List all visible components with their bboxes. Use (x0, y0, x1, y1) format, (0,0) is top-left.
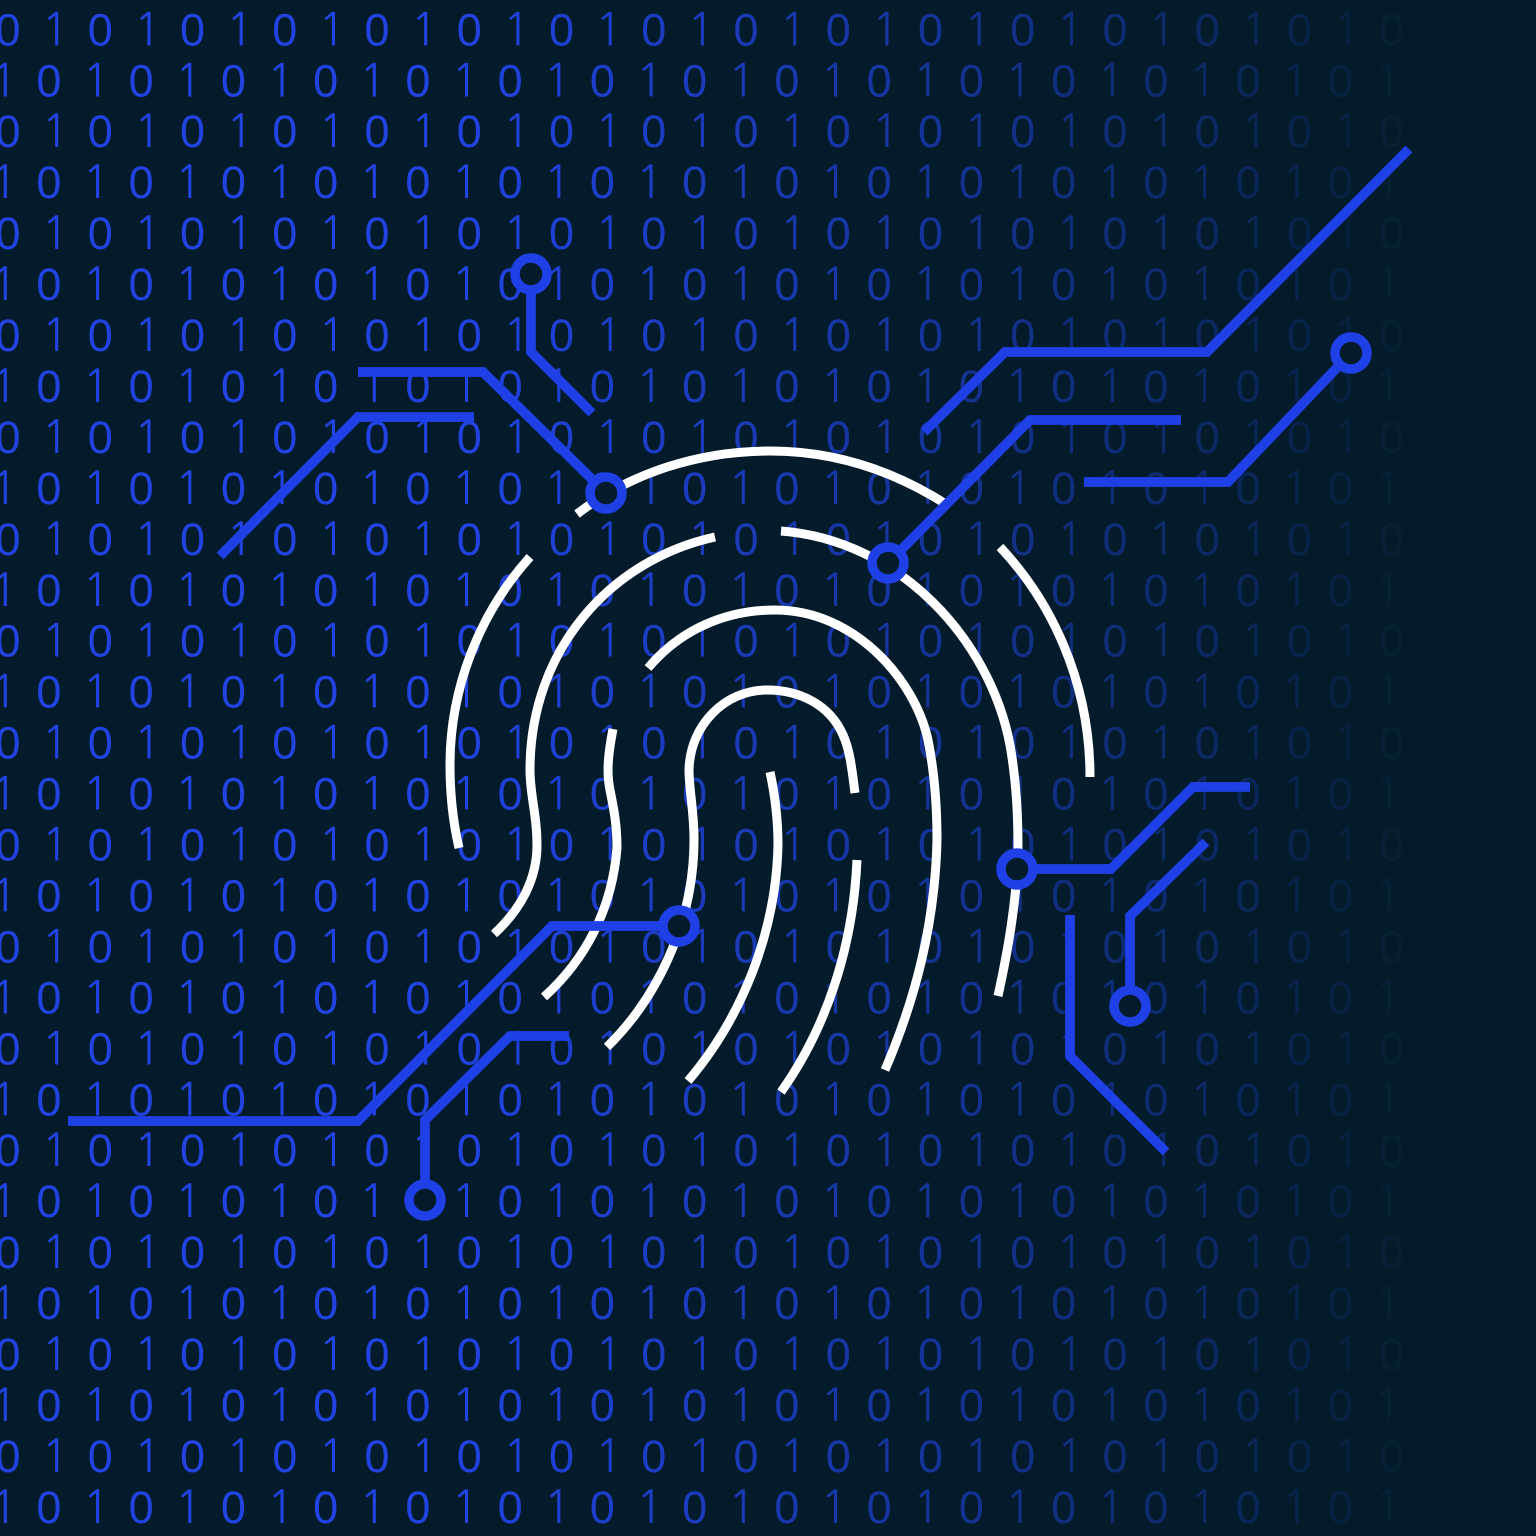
circuit traces (68, 149, 1409, 1200)
binary digit pattern: 0 1 0 1 0 1 0 1 0 1 0 1 0 1 0 1 0 1 0 1 0 1 0 1 0 1 0 1 0 1 0 (0, 4, 1409, 55)
binary digit pattern: 0 1 0 1 0 1 0 1 0 1 0 1 0 1 0 1 0 1 0 1 0 1 0 1 0 1 0 1 0 1 0 (0, 616, 1409, 667)
trace: mid right from fingerprint node (1017, 787, 1250, 869)
trace: lower right bare (1070, 915, 1166, 1152)
binary digit pattern: 1 0 1 0 1 0 1 0 1 0 1 0 1 0 1 0 1 0 1 0 1 0 1 0 1 0 1 0 1 0 1 (0, 972, 1403, 1023)
ridge: third arc (648, 610, 937, 1070)
binary digit pattern: 1 0 1 0 1 0 1 0 1 0 1 0 1 0 1 0 1 0 1 0 1 0 1 0 1 0 1 0 1 0 1 (0, 1482, 1403, 1533)
binary digit pattern: 0 1 0 1 0 1 0 1 0 1 0 1 0 1 0 1 0 1 0 1 0 1 0 1 0 1 0 1 0 1 0 (0, 412, 1409, 463)
binary digit pattern: 0 1 0 1 0 1 0 1 0 1 0 1 0 1 0 1 0 1 0 1 0 1 0 1 0 1 0 1 0 1 0 (0, 208, 1409, 259)
binary digit pattern: 0 1 0 1 0 1 0 1 0 1 0 1 0 1 0 1 0 1 0 1 0 1 0 1 0 1 0 1 0 1 0 (0, 106, 1409, 157)
binary digit pattern: 0 1 0 1 0 1 0 1 0 1 0 1 0 1 0 1 0 1 0 1 0 1 0 1 0 1 0 1 0 1 0 (0, 1227, 1409, 1278)
node: fingerprint lower (663, 910, 695, 942)
binary digit pattern: 0 1 0 1 0 1 0 1 0 1 0 1 0 1 0 1 0 1 0 1 0 1 0 1 0 1 0 1 0 1 0 (0, 310, 1409, 361)
trace: bottom left with node (425, 1036, 569, 1200)
ridge: inner arch (607, 690, 855, 1047)
binary digit pattern: 1 0 1 0 1 0 1 0 1 0 1 0 1 0 1 0 1 0 1 0 1 0 1 0 1 0 1 0 1 0 1 (0, 769, 1403, 820)
binary digit pattern: 0 1 0 1 0 1 0 1 0 1 0 1 0 1 0 1 0 1 0 1 0 1 0 1 0 1 0 1 0 1 0 (0, 1431, 1409, 1482)
binary digit pattern: 1 0 1 0 1 0 1 0 1 0 1 0 1 0 1 0 1 0 1 0 1 0 1 0 1 0 1 0 1 0 1 (0, 870, 1403, 921)
ridge: inner left curve (544, 729, 617, 997)
binary digit pattern: 1 0 1 0 1 0 1 0 1 0 1 0 1 0 1 0 1 0 1 0 1 0 1 0 1 0 1 0 1 0 1 (0, 565, 1403, 616)
binary digit pattern: 1 0 1 0 1 0 1 0 1 0 1 0 1 0 1 0 1 0 1 0 1 0 1 0 1 0 1 0 1 0 1 (0, 157, 1403, 208)
node: bottom left (409, 1184, 441, 1216)
trace: bottom left long (68, 926, 679, 1121)
trace: top right long (924, 149, 1409, 432)
binary digit pattern: 1 0 1 0 1 0 1 0 1 0 1 0 1 0 1 0 1 0 1 0 1 0 1 0 1 0 1 0 1 0 1 (0, 1074, 1403, 1125)
trace: right with node (1084, 353, 1351, 482)
binary digit pattern: 1 0 1 0 1 0 1 0 1 0 1 0 1 0 1 0 1 0 1 0 1 0 1 0 1 0 1 0 1 0 1 (0, 259, 1403, 310)
ridge: lower right curve (781, 860, 857, 1092)
binary digit pattern: 0 1 0 1 0 1 0 1 0 1 0 1 0 1 0 1 0 1 0 1 0 1 0 1 0 1 0 1 0 1 0 (0, 1125, 1409, 1176)
node: fingerprint upper right (872, 547, 904, 579)
node: fingerprint top (590, 477, 622, 509)
binary digit pattern: 0 1 0 1 0 1 0 1 0 1 0 1 0 1 0 1 0 1 0 1 0 1 0 1 0 1 0 1 0 1 0 (0, 1023, 1409, 1074)
ridge: centre curve (688, 772, 778, 1081)
binary digit pattern: 1 0 1 0 1 0 1 0 1 0 1 0 1 0 1 0 1 0 1 0 1 0 1 0 1 0 1 0 1 0 1 (0, 1278, 1403, 1329)
binary digit pattern: 0 1 0 1 0 1 0 1 0 1 0 1 0 1 0 1 0 1 0 1 0 1 0 1 0 1 0 1 0 1 0 (0, 1329, 1409, 1380)
binary digit pattern: 1 0 1 0 1 0 1 0 1 0 1 0 1 0 1 0 1 0 1 0 1 0 1 0 1 0 1 0 1 0 1 (0, 1380, 1403, 1431)
trace: lower right with node (1130, 842, 1206, 1006)
ridge: second left arc (494, 537, 715, 934)
binary digit pattern: 0 1 0 1 0 1 0 1 0 1 0 1 0 1 0 1 0 1 0 1 0 1 0 1 0 1 0 1 0 1 0 (0, 921, 1409, 972)
trace: far left (220, 417, 474, 556)
binary digit pattern: 0 1 0 1 0 1 0 1 0 1 0 1 0 1 0 1 0 1 0 1 0 1 0 1 0 1 0 1 0 1 0 (0, 514, 1409, 565)
binary digit pattern: 1 0 1 0 1 0 1 0 1 0 1 0 1 0 1 0 1 0 1 0 1 0 1 0 1 0 1 0 1 0 1 (0, 1176, 1403, 1227)
binary digit pattern: 1 0 1 0 1 0 1 0 1 0 1 0 1 0 1 0 1 0 1 0 1 0 1 0 1 0 1 0 1 0 1 (0, 667, 1403, 718)
binary digit pattern: 1 0 1 0 1 0 1 0 1 0 1 0 1 0 1 0 1 0 1 0 1 0 1 0 1 0 1 0 1 0 1 (0, 55, 1403, 106)
binary digit pattern: 0 1 0 1 0 1 0 1 0 1 0 1 0 1 0 1 0 1 0 1 0 1 0 1 0 1 0 1 0 1 0 (0, 820, 1409, 870)
binary digit pattern: 1 0 1 0 1 0 1 0 1 0 1 0 1 0 1 0 1 0 1 0 1 0 1 0 1 0 1 0 1 0 1 (0, 361, 1403, 412)
trace: to fingerprint top node (358, 372, 606, 493)
trace: upper right to fingerprint node (888, 420, 1181, 563)
ridge: outer right arc (1000, 547, 1090, 777)
ridge: second right arc (781, 531, 1018, 996)
node: far right (1335, 337, 1367, 369)
trace: top left with node (531, 274, 592, 413)
node: lower right (1114, 990, 1146, 1022)
node: fingerprint right (1001, 853, 1033, 885)
binary digit pattern: 0 1 0 1 0 1 0 1 0 1 0 1 0 1 0 1 0 1 0 1 0 1 0 1 0 1 0 1 0 1 0 (0, 718, 1409, 769)
ridge: outer left arc (450, 557, 530, 848)
fingerprint (450, 451, 1090, 1092)
node: top left (515, 258, 547, 290)
ridge: outer top arc (577, 451, 949, 514)
circuit nodes (409, 258, 1367, 1216)
binary digit pattern: 1 0 1 0 1 0 1 0 1 0 1 0 1 0 1 0 1 0 1 0 1 0 1 0 1 0 1 0 1 0 1 0 1 (0, 463, 1496, 514)
